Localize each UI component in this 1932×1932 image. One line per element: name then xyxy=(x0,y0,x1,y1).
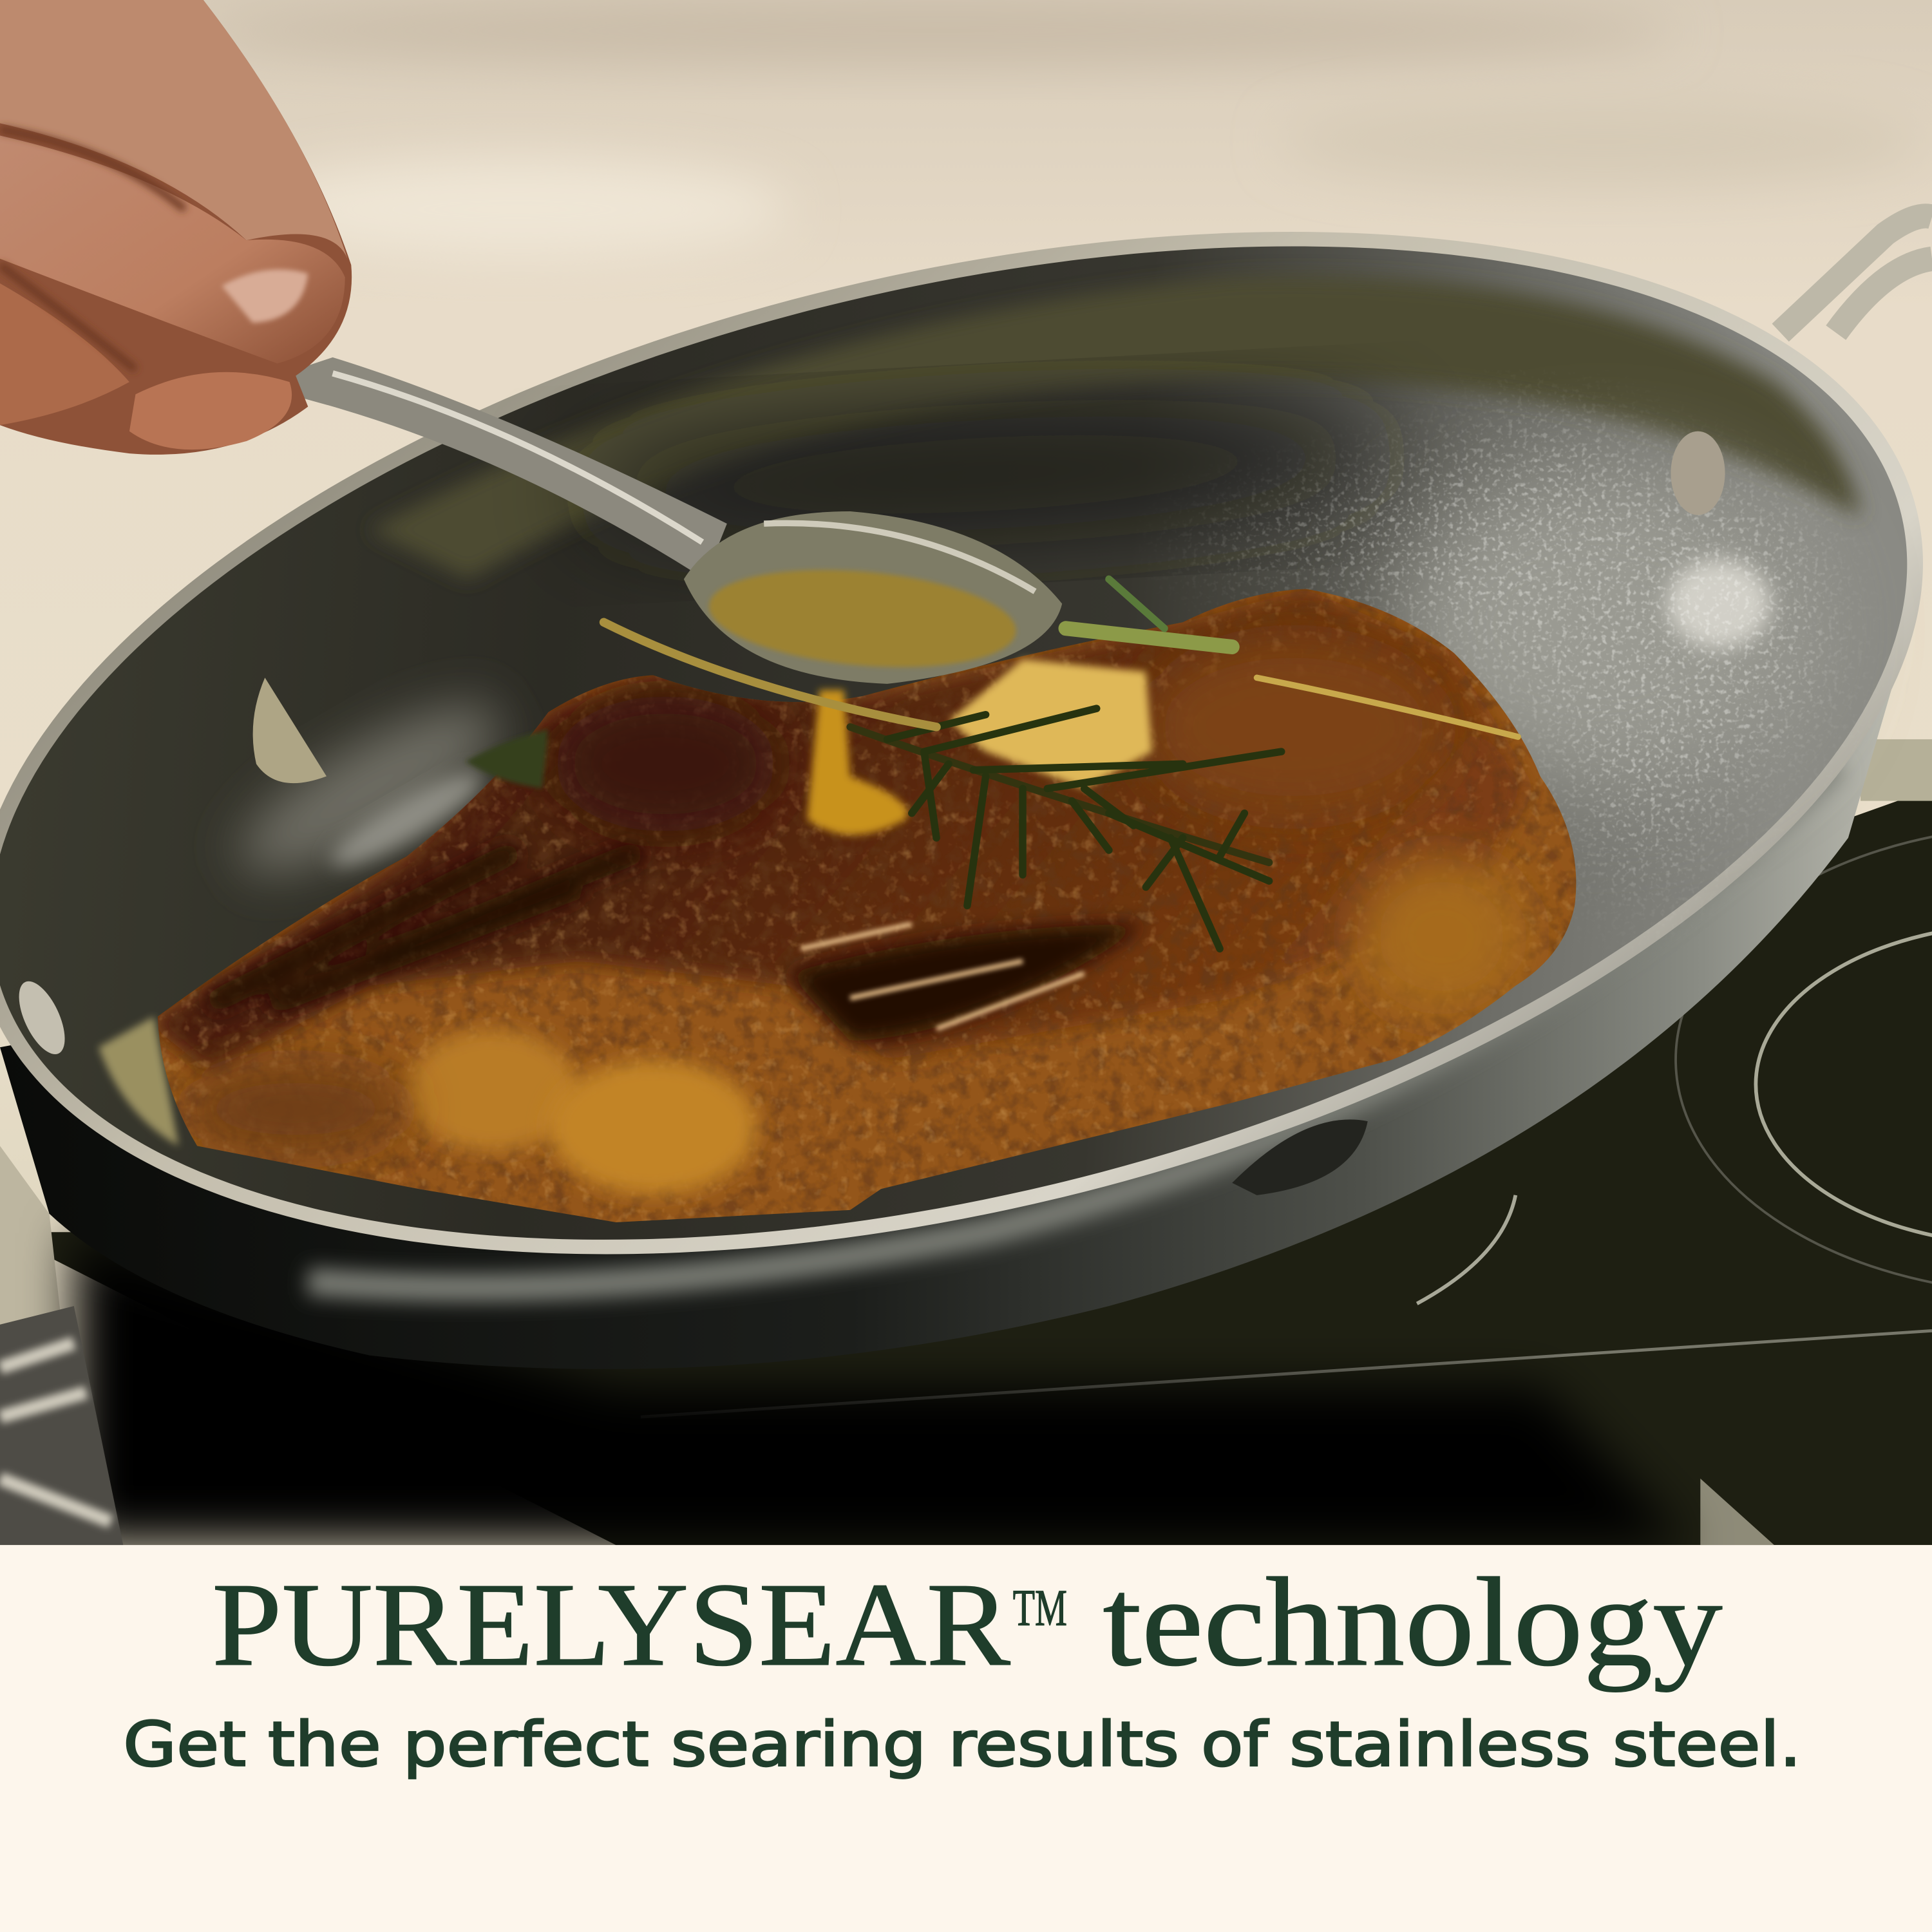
steak seared top xyxy=(148,589,1528,1072)
steak crust light texture xyxy=(123,554,1602,1244)
interior honeycomb wall shading xyxy=(370,276,1861,579)
hand xyxy=(0,0,352,455)
dark shadow under pan xyxy=(74,1232,1688,1545)
pan outer body xyxy=(0,690,1891,1369)
spoon xyxy=(277,357,1062,684)
green herb left of steak xyxy=(466,730,548,788)
pan interior xyxy=(0,73,1932,1412)
counter edge lower left xyxy=(0,1146,60,1325)
rosemary sprig xyxy=(850,708,1282,949)
golden fat lobes xyxy=(406,1029,579,1152)
thyme stems xyxy=(604,579,1518,737)
heading: technology xyxy=(1103,1551,1723,1692)
photo: pan searing a steak xyxy=(0,0,1932,1545)
steak shiny glaze xyxy=(788,924,1146,1041)
pan rivet lower left xyxy=(10,975,74,1061)
subheading: Get the perfect searing results of stainless steel. xyxy=(123,1709,1801,1781)
steak crust dark texture xyxy=(123,554,1602,1244)
second pan handle lower left xyxy=(0,1306,123,1545)
pan rivet top right xyxy=(1671,431,1725,515)
garlic clove xyxy=(253,677,327,783)
dark pan floor behind spoon xyxy=(577,398,1395,551)
butter on steak xyxy=(949,659,1152,788)
caption panel xyxy=(0,1545,1932,1932)
thumb xyxy=(0,135,345,363)
spoon handle xyxy=(277,357,727,579)
melted butter in spoon xyxy=(705,558,1020,679)
heading: TM xyxy=(1013,1580,1067,1637)
pan rim xyxy=(0,55,1932,1431)
pan handle right xyxy=(1781,216,1932,333)
lower fingers xyxy=(0,283,129,425)
spoon bowl xyxy=(684,511,1062,684)
butter drip xyxy=(807,690,907,835)
bright hexclad surface right xyxy=(1392,468,1811,788)
steak xyxy=(123,554,1602,1244)
sizzle speckle texture xyxy=(1171,419,1824,912)
upper fingers xyxy=(0,0,348,259)
steak char lines xyxy=(209,850,641,1004)
marble counter xyxy=(0,0,1932,1545)
pan body reflections xyxy=(308,764,1836,1287)
heading xyxy=(212,1551,1723,1692)
caption background xyxy=(0,1545,1932,1932)
finger creases xyxy=(0,129,185,370)
heading: PURELYSEAR xyxy=(212,1559,1010,1691)
butter left of steak xyxy=(99,1016,178,1146)
steak golden base xyxy=(123,554,1602,1244)
induction cooktop xyxy=(0,739,1932,1545)
sizzle highlights left xyxy=(220,676,520,901)
thumbnail xyxy=(222,269,308,323)
